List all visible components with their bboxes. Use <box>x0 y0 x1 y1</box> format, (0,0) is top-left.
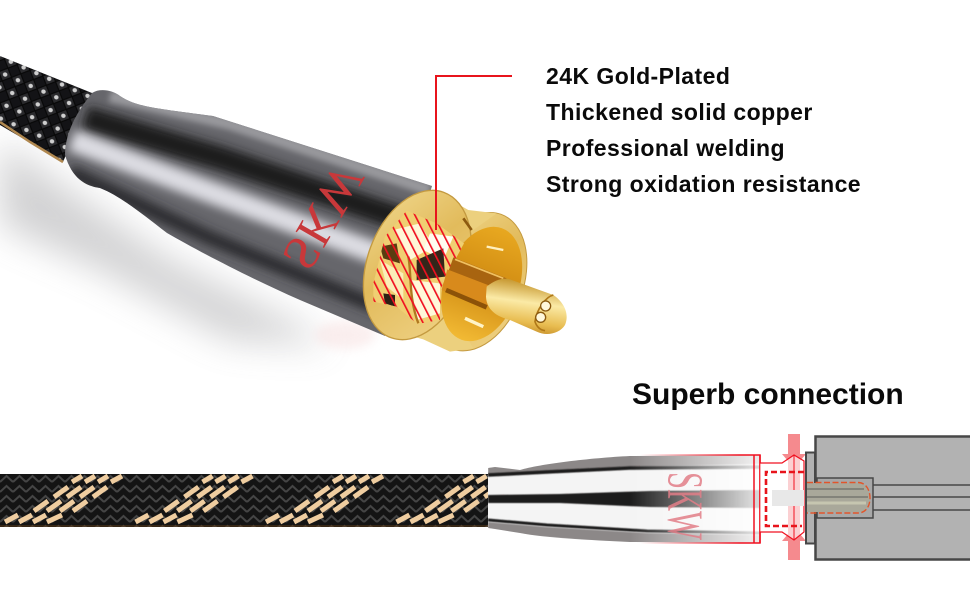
rear ring <box>344 175 491 355</box>
feature: welding: Professional welding <box>546 135 785 161</box>
dashed red insert outline <box>766 472 804 526</box>
connector shadow <box>0 140 330 345</box>
gold braid bands <box>5 476 514 522</box>
red leader line <box>436 76 512 230</box>
bridge between rings <box>390 190 497 352</box>
front ring <box>408 198 545 365</box>
cup highlights <box>463 218 503 327</box>
connector neck outline <box>760 455 804 540</box>
reflection under plug <box>315 321 375 349</box>
heading: superb connection: Superb connection <box>632 378 904 411</box>
feature: oxidation: Strong oxidation resistance <box>546 171 861 197</box>
grey socket block <box>806 436 970 560</box>
pink compression bar <box>782 434 806 560</box>
inserted centre pin <box>807 482 870 513</box>
red outline of barrel <box>640 455 760 543</box>
gold plug head <box>362 190 567 352</box>
inner cup <box>426 215 537 353</box>
SKW logo, bottom: SKW <box>656 472 712 540</box>
SKW logo on barrel: SKW <box>271 155 376 280</box>
hatched section <box>373 211 464 324</box>
braided cable, top <box>0 56 92 162</box>
prongs <box>447 257 507 297</box>
feature: copper: Thickened solid copper <box>546 99 813 125</box>
metal barrel <box>65 90 432 336</box>
feature: gold plating: 24K Gold-Plated <box>546 63 730 89</box>
silver barrel, bottom <box>488 456 760 542</box>
center pin <box>486 279 567 334</box>
feature list <box>546 63 861 197</box>
braided cable, bottom <box>0 474 514 527</box>
